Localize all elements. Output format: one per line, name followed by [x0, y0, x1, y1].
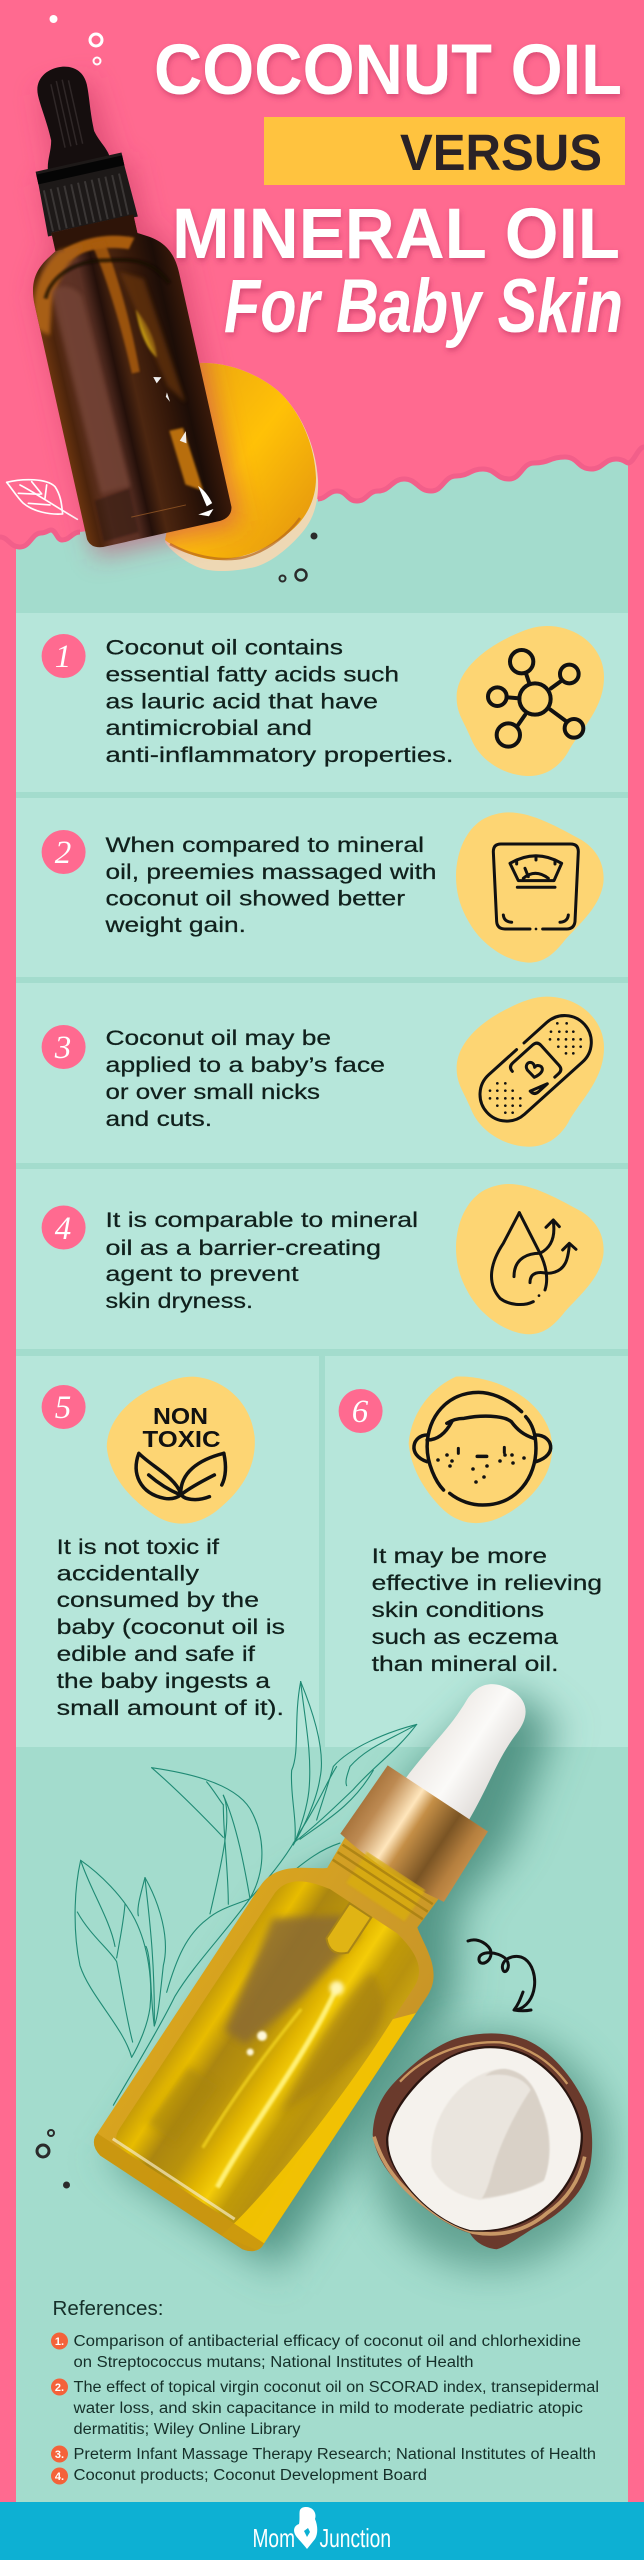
- text block 6: [372, 1545, 602, 1676]
- non toxic label: [142, 1403, 220, 1452]
- reference 4: Coconut products; Coconut Development Board: [74, 2467, 427, 2484]
- title: [154, 31, 625, 349]
- decorative dots: near oil drop: [280, 532, 318, 582]
- text block 4: agent to prevent: [106, 1263, 299, 1286]
- text block 6: effective in relieving: [372, 1572, 602, 1595]
- neck threads: [346, 1851, 425, 1921]
- versus banner: [264, 117, 625, 185]
- icon: molecule on blob: [457, 626, 604, 776]
- text block 2: oil, preemies massaged with: [106, 861, 436, 884]
- reference 1: on Streptococcus mutans; National Institutes of Health: [74, 2354, 474, 2371]
- badge 2: 2: [55, 835, 71, 871]
- badge 3: 3: [54, 1030, 71, 1066]
- icon: white leaf: [7, 480, 77, 519]
- card 4 background: [16, 1169, 628, 1349]
- text block 3: Coconut oil may be: [106, 1027, 331, 1050]
- brownish reflection: [222, 1912, 363, 2045]
- text block 6: It may be more: [372, 1545, 547, 1568]
- text block 5: accidentally: [57, 1563, 200, 1586]
- text block 6: than mineral oil.: [372, 1653, 558, 1676]
- text block 6: such as eczema: [372, 1626, 558, 1649]
- oil liquid: [116, 1882, 419, 2224]
- non toxic label: NON: [153, 1403, 208, 1429]
- text block 1: [106, 636, 454, 767]
- illustration: halved coconut: [373, 2033, 592, 2249]
- badge 3: [42, 1025, 86, 1069]
- title line: mineral oil: MINERAL OIL: [172, 195, 620, 274]
- amber glass body: [20, 207, 234, 550]
- icon: water drop with arrows on blob: [456, 1184, 604, 1334]
- illustration: spilled oil drop: [165, 363, 318, 571]
- card 5 background: [16, 1356, 319, 1747]
- icon: non toxic on blob: [107, 1377, 255, 1524]
- shadow behind amber bottle: [0, 70, 240, 556]
- illustration: leaf line art: [75, 1682, 417, 2105]
- reference 4: 4.: [55, 2471, 64, 2483]
- badge 5: 5: [55, 1390, 71, 1426]
- text block 4: skin dryness.: [106, 1290, 253, 1313]
- badge 5: [42, 1385, 86, 1429]
- illustration: lower gold oil dropper bottle: [94, 1684, 526, 2252]
- text block 5: baby (coconut oil is: [57, 1616, 285, 1639]
- reference 2: The effect of topical virgin coconut oil on SCORAD index, transepidermal: [74, 2379, 599, 2396]
- text block 1: antimicrobial and: [106, 717, 312, 740]
- text block 2: [104, 834, 437, 937]
- bright streak: [209, 1988, 345, 2187]
- badge 1: 1: [55, 639, 71, 675]
- text block 5: the baby ingests a: [57, 1670, 270, 1693]
- badge 2: [42, 830, 86, 874]
- footer bar: [0, 2502, 644, 2560]
- card 1 background: [16, 613, 628, 792]
- logo: MomJunction: [252, 2507, 391, 2553]
- non toxic label: TOXIC: [142, 1426, 220, 1452]
- text block 3: [106, 1027, 385, 1131]
- icon: baby face on blob: [409, 1377, 552, 1523]
- icon: weighing scale on blob: [456, 812, 604, 963]
- text block 4: [106, 1209, 418, 1313]
- black rubber bulb: [26, 60, 111, 175]
- reference 1: [51, 2332, 581, 2371]
- reference 3: 3.: [55, 2449, 64, 2461]
- glass reflections: [33, 218, 214, 542]
- gold cap: [338, 1764, 490, 1906]
- text block 1: anti-inflammatory properties.: [106, 744, 454, 767]
- rubber dropper bulb: [404, 1668, 542, 1822]
- text block 1: Coconut oil contains: [106, 636, 343, 660]
- text block 5: [57, 1536, 285, 1720]
- text block 5: It is not toxic if: [57, 1536, 219, 1559]
- yellow right rim: [234, 2013, 416, 2250]
- title line: versus: VERSUS: [400, 124, 602, 181]
- text block 4: oil as a barrier-creating: [106, 1237, 381, 1260]
- reference 1: 1.: [55, 2336, 64, 2348]
- dropper tube end: [323, 1903, 371, 1958]
- badge 1: [42, 634, 86, 678]
- text block 3: or over small nicks: [106, 1081, 320, 1104]
- text block 5: consumed by the: [57, 1589, 259, 1612]
- badge 6: 6: [352, 1394, 369, 1430]
- text block 1: as lauric acid that have: [106, 690, 378, 714]
- reference 2: water loss, and skin capacitance in mild to moderate pediatric atopic: [72, 2400, 583, 2417]
- references heading: References:: [52, 2298, 164, 2320]
- text block 5: small amount of it).: [57, 1697, 284, 1720]
- badge 6: [339, 1389, 383, 1433]
- text block 4: It is comparable to mineral: [106, 1209, 418, 1232]
- reference 2: dermatitis; Wiley Online Library: [74, 2421, 301, 2438]
- text block 5: edible and safe if: [57, 1643, 255, 1666]
- text block 2: When compared to mineral: [106, 834, 424, 857]
- references list: [51, 2332, 599, 2484]
- logo: MomJunction: Junction: [320, 2523, 391, 2553]
- glass body: [88, 1813, 476, 2258]
- reference 2: 2.: [55, 2382, 64, 2394]
- glass bottom band: [87, 2133, 264, 2258]
- glass contents: [94, 1844, 434, 2252]
- arrow: squiggle pointing to coconut: [468, 1940, 535, 2011]
- reference 1: Comparison of antibacterial efficacy of coconut oil and chlorhexidine: [74, 2333, 581, 2350]
- reference 3: Preterm Infant Massage Therapy Research; National Institutes of Health: [74, 2446, 596, 2463]
- card 2 background: [16, 798, 628, 977]
- text block 2: weight gain.: [104, 914, 246, 937]
- logo: MomJunction: Mom: [252, 2523, 295, 2553]
- text block 6: skin conditions: [372, 1599, 544, 1622]
- badge 4: [42, 1206, 86, 1250]
- decorative shadow behind lower bottle and coconut: [112, 1651, 614, 2270]
- title line: coconut oil: COCONUT OIL: [154, 31, 622, 110]
- reference 2: [51, 2378, 599, 2438]
- illustration: amber dropper bottle: [33, 66, 232, 548]
- text block 1: essential fatty acids such: [106, 664, 399, 686]
- text block 3: and cuts.: [106, 1108, 212, 1131]
- decorative dots: top left: [50, 15, 102, 64]
- icon: bandage on blob: [457, 997, 604, 1147]
- glints: [255, 2029, 269, 2043]
- badge 4: 4: [55, 1211, 71, 1247]
- decorative dots: lower left: [37, 2130, 70, 2188]
- card 3 background: [16, 983, 628, 1163]
- specular highlights: [153, 377, 162, 384]
- text block 3: applied to a baby’s face: [106, 1054, 385, 1077]
- text block 2: coconut oil showed better: [106, 888, 405, 911]
- ribbed black cap: [34, 152, 138, 237]
- card 6 background: [325, 1356, 628, 1747]
